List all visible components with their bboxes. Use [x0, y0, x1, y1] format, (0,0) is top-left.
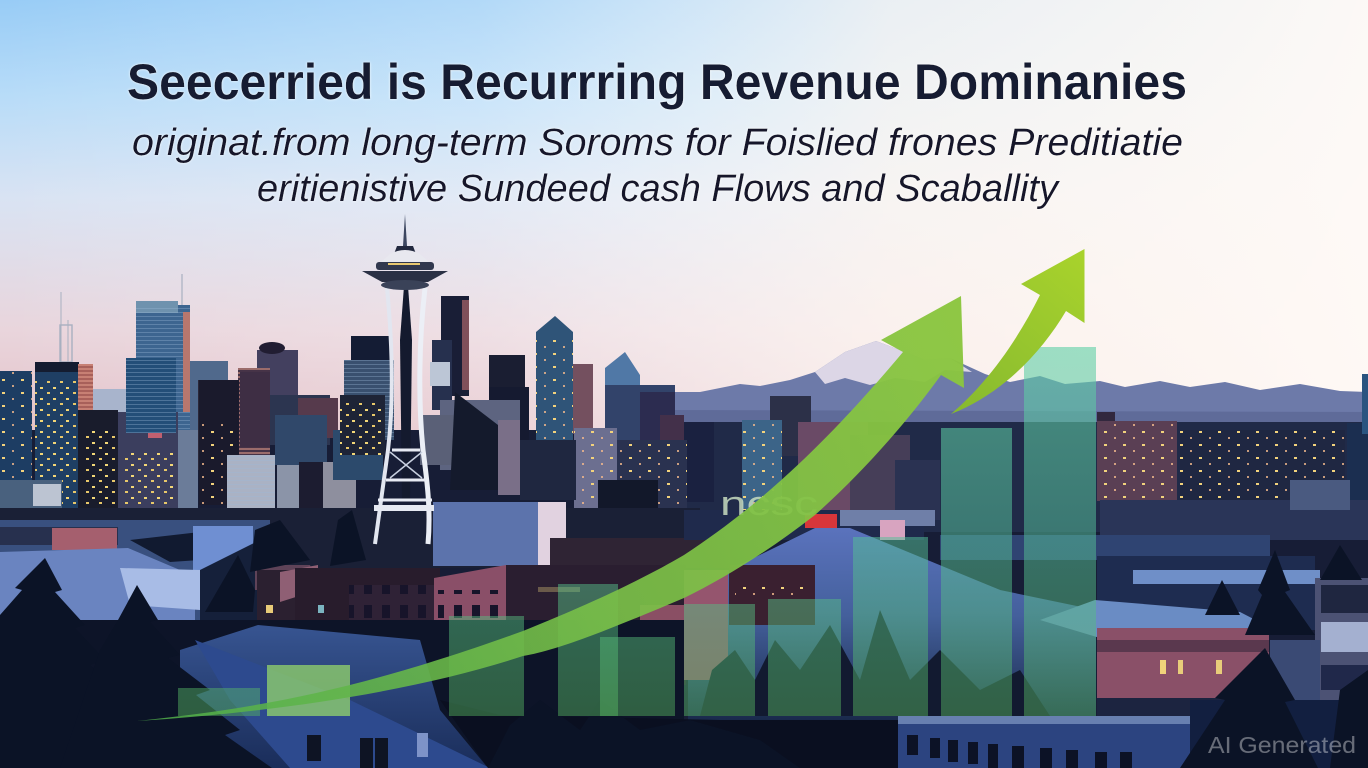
needle legs — [375, 286, 432, 544]
sky background — [0, 0, 1368, 440]
subtitle line one: originat.from long-term Soroms for Foislied frones Preditiatie — [132, 122, 1183, 164]
bar 6 — [684, 604, 755, 716]
ground base — [0, 430, 1368, 768]
brick buildings centre-left — [257, 565, 686, 720]
bar 10 — [1024, 347, 1096, 716]
low rooftops band left — [0, 502, 730, 640]
trees — [0, 510, 1368, 768]
bar 5 — [600, 637, 675, 716]
tree: left large — [0, 558, 150, 768]
bar 8 — [853, 537, 928, 716]
Space Needle — [362, 214, 448, 544]
bar 1 — [178, 688, 260, 716]
front row towers — [35, 362, 79, 512]
building sign lettering: ncsc — [720, 485, 818, 523]
antennas — [60, 274, 182, 362]
centre-right dome and mid-ground buildings — [684, 510, 1368, 768]
bar 3 — [449, 616, 524, 716]
bar 7 — [768, 599, 841, 716]
growth arrow two — [951, 249, 1084, 414]
tree: left second — [60, 585, 272, 768]
bar 9 — [941, 428, 1012, 716]
downtown skyline left — [0, 274, 687, 530]
bar chart: rising revenue bars — [178, 347, 1096, 716]
title: Seecerried is Recurrring Revenue Dominanies — [127, 54, 1187, 110]
observation deck — [374, 505, 434, 511]
growth arrow one — [137, 296, 964, 721]
subtitle line two: eritienistive Sundeed cash Flows and Scaballity — [257, 168, 1060, 210]
distant hills and right-hand city — [670, 374, 1368, 540]
haze buildings — [92, 389, 128, 429]
bar 2 — [267, 665, 350, 716]
mid-ground trees behind bars — [700, 610, 1050, 716]
watermark: AI Generated — [1208, 732, 1356, 758]
bottom foreground — [0, 620, 1368, 768]
mountain range with snow peak — [672, 341, 1368, 440]
towers back row — [136, 305, 190, 435]
bar 4 — [558, 584, 618, 716]
